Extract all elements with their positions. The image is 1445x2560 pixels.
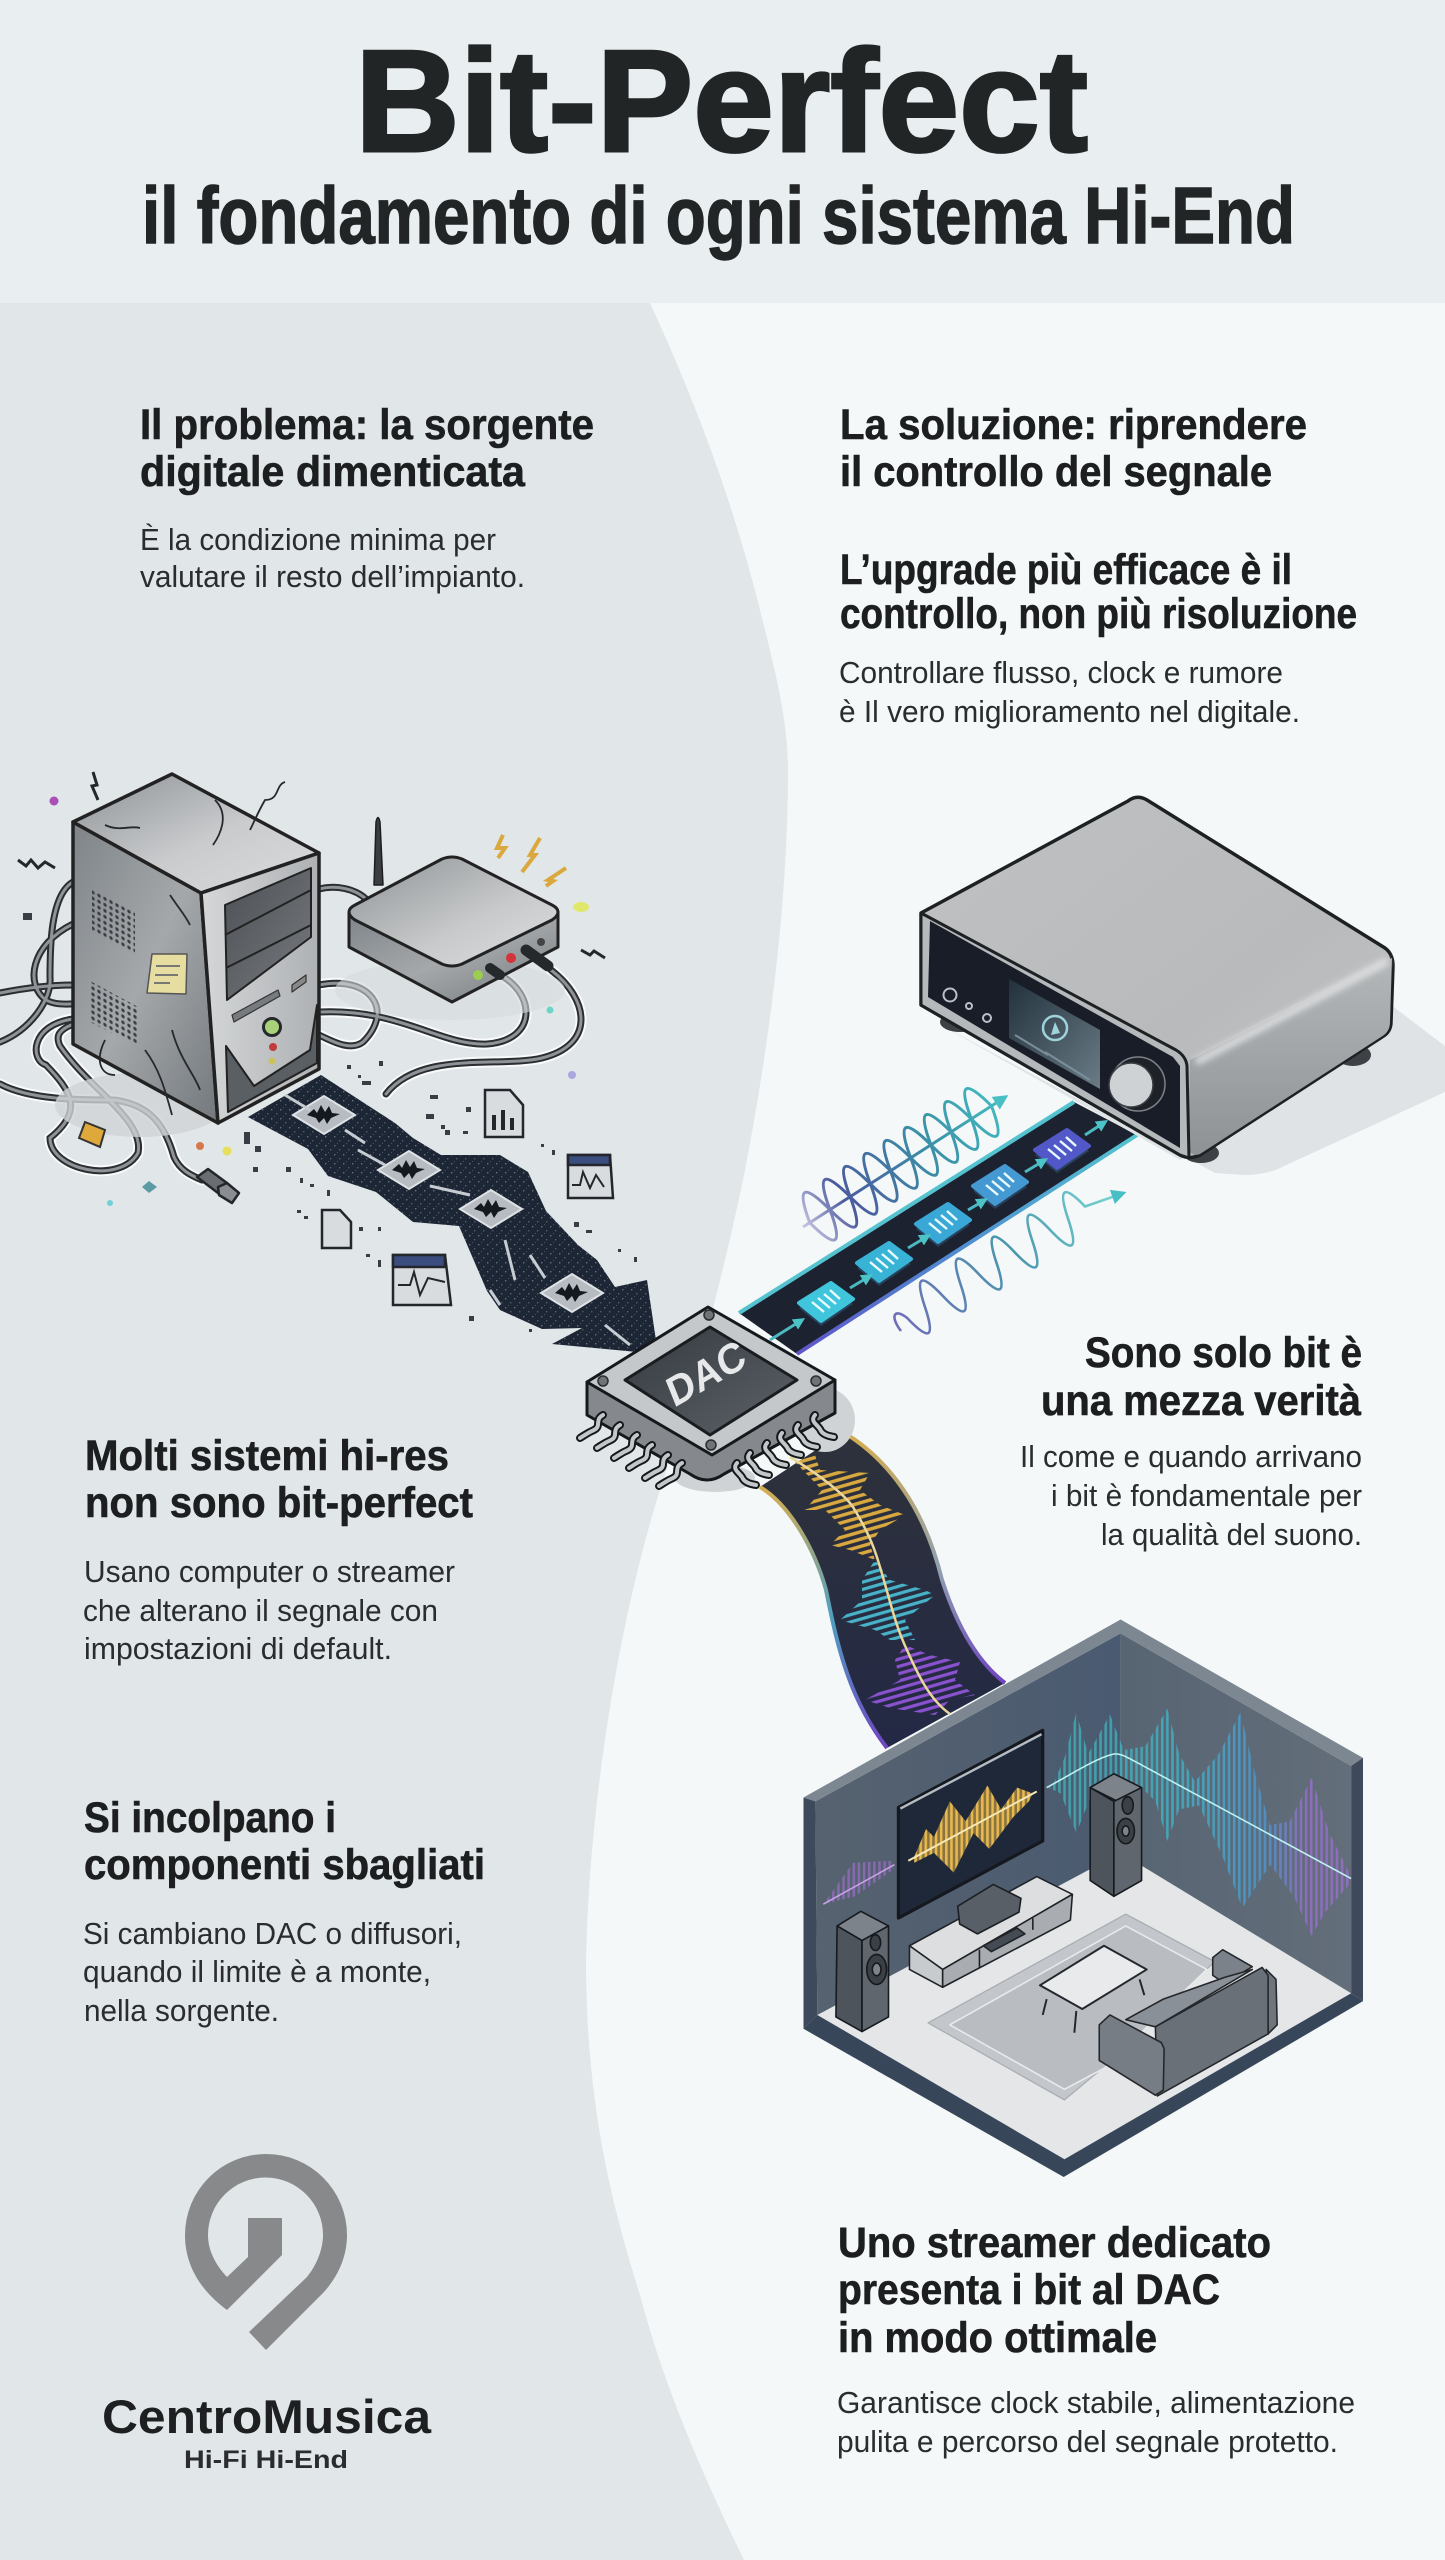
text block: sono solo bit: i bit è fondamentale per <box>1051 1478 1362 1513</box>
shadow <box>932 1005 1445 1175</box>
front panel <box>928 921 1180 1148</box>
waveform bars <box>795 1455 975 1715</box>
coffee table <box>1040 1946 1147 2033</box>
illustration: tangled cables <box>0 882 581 1203</box>
text block: upgrade <box>839 546 1357 729</box>
logo: centromusica <box>102 2154 432 2474</box>
tower front panel <box>201 853 319 1123</box>
text block: molti sistemi: Molti sistemi hi-res <box>85 1432 449 1480</box>
data packets <box>799 1130 1089 1326</box>
text block: il problema: digitale dimenticata <box>140 448 526 496</box>
title: Bit-Perfect <box>355 20 1088 182</box>
text block: uno streamer dedicato <box>837 2219 1355 2459</box>
text block: upgrade: L’upgrade più efficace è il <box>840 546 1292 594</box>
text block: molti sistemi: Usano computer o streamer <box>84 1554 455 1589</box>
text block: sono solo bit: la qualità del suono. <box>1101 1517 1362 1552</box>
tv <box>898 1730 1043 1918</box>
illustration: pc tower <box>55 774 319 1137</box>
text block: uno streamer dedicato: in modo ottimale <box>838 2314 1157 2362</box>
text block: uno streamer dedicato: Garantisce clock stabile, alimentazione <box>837 2385 1355 2420</box>
illustration: dac chip <box>580 1307 855 1492</box>
text block: si incolpano <box>83 1794 485 2028</box>
text block: sono solo bit: Il come e quando arrivano <box>1020 1439 1362 1474</box>
right wall <box>1121 1633 1351 1993</box>
logo mark <box>185 2154 347 2350</box>
left grey panel <box>0 303 788 2560</box>
icons: damaged files <box>322 1090 613 1305</box>
floor <box>817 1853 1351 2159</box>
icon: usb plug <box>197 1169 239 1203</box>
text block: uno streamer dedicato: presenta i bit al DAC <box>838 2266 1220 2314</box>
sticky note <box>147 954 187 994</box>
text block: sono solo bit: una mezza verità <box>1041 1377 1362 1425</box>
rug <box>928 1914 1215 2100</box>
feet <box>940 1012 1371 1163</box>
text block: molti sistemi: che alterano il segnale con <box>83 1593 438 1628</box>
dac label: DAC <box>660 1331 752 1416</box>
buttons <box>944 988 991 1022</box>
text block: molti sistemi: non sono bit-perfect <box>85 1479 473 1527</box>
illustration: streamer <box>921 797 1445 1175</box>
text block: molti sistemi <box>83 1432 473 1666</box>
text block: molti sistemi: impostazioni di default. <box>84 1631 392 1666</box>
text block: sono solo bit: Sono solo bit è <box>1085 1329 1362 1377</box>
pins <box>580 1415 834 1486</box>
text block: si incolpano: componenti sbagliati <box>84 1841 485 1889</box>
debris: scattered pixels <box>244 1061 637 1332</box>
logo tagline: Hi-Fi Hi-End <box>184 2446 348 2474</box>
packet arrows <box>770 1122 1105 1340</box>
lower dark section <box>226 1005 317 1112</box>
volume knob <box>1109 1057 1165 1111</box>
text block: il problema: È la condizione minima per <box>140 522 496 557</box>
text block: la soluzione <box>840 401 1307 496</box>
signal wave: double sine <box>788 1075 1018 1251</box>
text block: si incolpano: nella sorgente. <box>84 1993 279 2028</box>
text block: upgrade: Controllare flusso, clock e rumore <box>839 655 1283 690</box>
text block: uno streamer dedicato: pulita e percorso del segnale protetto. <box>837 2424 1338 2459</box>
text block: si incolpano: quando il limite è a monte, <box>83 1954 431 1989</box>
wall waveform <box>823 1709 1351 1936</box>
frame edges <box>803 1797 817 2029</box>
tower side panel <box>73 822 218 1123</box>
signal wave: single sine <box>884 1168 1130 1345</box>
title <box>142 20 1295 260</box>
center speaker <box>958 1884 1021 1934</box>
front bezel <box>921 913 1189 1158</box>
vent grilles <box>90 889 138 1046</box>
chassis silhouette <box>921 797 1393 1158</box>
sparks and noise marks <box>18 772 605 1206</box>
illustration: listening room <box>803 1620 1363 2177</box>
chip body <box>587 1380 835 1480</box>
front speaker <box>836 1911 889 2032</box>
text block: il problema <box>140 401 594 594</box>
wall caps <box>803 1620 1363 1801</box>
text block: il problema: Il problema: la sorgente <box>140 401 594 449</box>
power button and leds <box>232 975 306 1064</box>
text block: la soluzione: il controllo del segnale <box>840 448 1272 496</box>
left wall <box>815 1633 1121 2015</box>
text block: la soluzione: La soluzione: riprendere <box>840 401 1307 449</box>
tower top face <box>73 774 319 893</box>
text block: upgrade: è Il vero miglioramento nel digitale. <box>839 694 1300 729</box>
chip plate <box>587 1307 835 1455</box>
back speaker <box>1090 1774 1142 1896</box>
illustration: signal ribbon to streamer <box>739 1102 1137 1354</box>
text block: uno streamer dedicato: Uno streamer dedicato <box>838 2219 1271 2267</box>
illustration: waveform ribbon from dac to room <box>760 1432 1005 1748</box>
chip die <box>625 1327 797 1435</box>
router body <box>349 912 558 1002</box>
logo wordmark: CentroMusica <box>102 2390 432 2443</box>
router leds and plugs <box>473 938 548 980</box>
illustration: router <box>335 818 565 1020</box>
text block: upgrade: controllo, non più risoluzione <box>840 590 1357 638</box>
corner screws <box>598 1310 821 1450</box>
text block: il problema: valutare il resto dell’impianto. <box>140 559 525 594</box>
drive bays <box>225 868 311 1000</box>
header band <box>0 0 1445 303</box>
side face <box>1188 958 1392 1155</box>
text block: sono solo bit <box>1020 1329 1362 1552</box>
illustration: broken data stream <box>248 1075 658 1354</box>
router top <box>349 857 558 966</box>
edge highlight <box>1196 961 1388 1062</box>
text block: si incolpano: Si cambiano DAC o diffusori, <box>83 1916 462 1951</box>
text block: si incolpano: Si incolpano i <box>84 1794 336 1842</box>
sofa <box>1099 1950 1277 2096</box>
screen <box>1009 979 1100 1089</box>
antenna <box>374 818 383 885</box>
tv stand <box>909 1877 1072 1987</box>
